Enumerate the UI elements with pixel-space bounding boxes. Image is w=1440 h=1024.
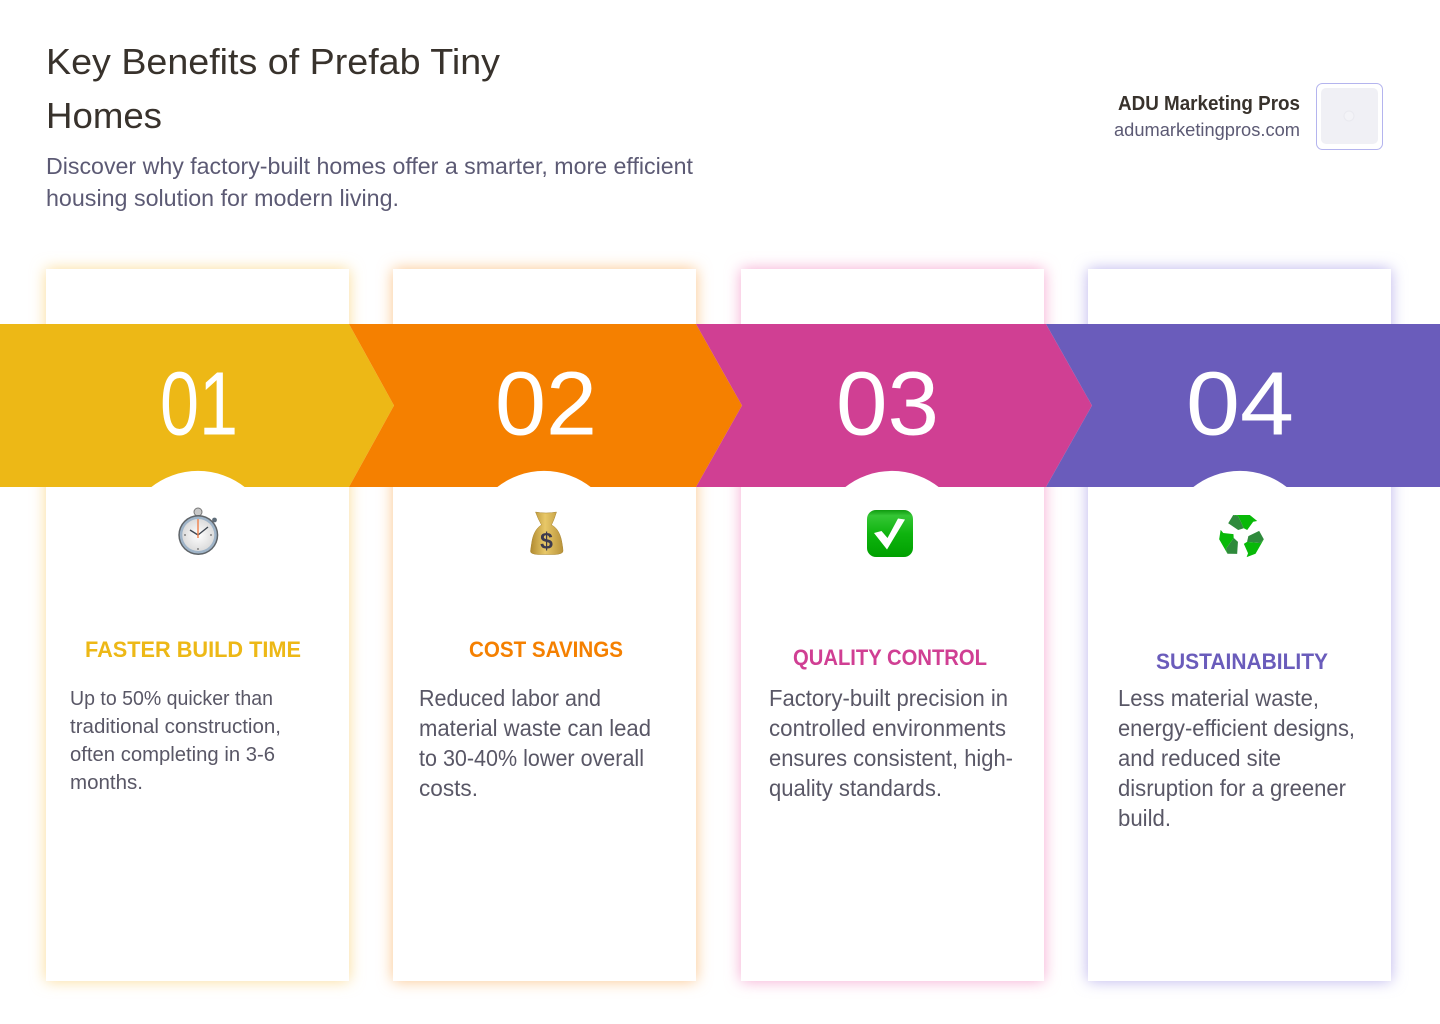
subtitle: housing solution for modern living. (46, 185, 399, 211)
number 03: 03 (836, 354, 939, 454)
icon: stopwatch (178, 508, 218, 555)
heading: sustainability: SUSTAINABILITY (1156, 649, 1328, 674)
subtitle (46, 153, 694, 211)
brand name and website: ADU Marketing Pros (1118, 93, 1300, 115)
text: sustainability description: build. (1118, 805, 1171, 831)
arrow: step 4 chevron (1046, 324, 1440, 487)
text: cost savings description: to 30-40% lower overall (419, 745, 644, 771)
brand name and website (1114, 93, 1300, 140)
icon circle tops (150, 471, 1288, 488)
text: quality control description: controlled environments (769, 715, 1006, 741)
panel: quality control card (741, 269, 1044, 981)
arrow: step 2 chevron (349, 324, 742, 487)
logo placeholder (1316, 84, 1382, 150)
number 01: 01 (160, 354, 238, 454)
panel: cost savings card (393, 269, 696, 981)
text: faster build time description: often completing in 3-6 (70, 744, 275, 766)
subtitle: Discover why factory-built homes offer a smarter, more efficient (46, 153, 694, 179)
text: sustainability description: energy-efficient designs, (1118, 715, 1355, 741)
text: sustainability description: Less material waste, (1118, 685, 1319, 711)
brand name and website: adumarketingpros.com (1114, 119, 1300, 140)
text: quality control description: ensures consistent, high- (769, 745, 1013, 771)
number 02: 02 (495, 354, 597, 454)
icon: money bag: $ (540, 528, 553, 554)
arrow: step 1 chevron (0, 324, 394, 487)
text: cost savings description (419, 685, 651, 801)
text: faster build time description: traditional construction, (70, 716, 281, 738)
heading: faster build time: FASTER BUILD TIME (85, 637, 301, 662)
icon: check mark (867, 510, 913, 557)
text: sustainability description: and reduced site (1118, 745, 1281, 771)
text: cost savings description: material waste can lead (419, 715, 651, 741)
text: quality control description: quality standards. (769, 775, 942, 801)
title: Homes (46, 95, 162, 136)
text: quality control description (769, 685, 1013, 801)
heading: quality control: QUALITY CONTROL (793, 645, 987, 670)
icon: recycling symbol (1215, 515, 1266, 560)
text: sustainability description (1118, 685, 1355, 831)
text: faster build time description (70, 688, 281, 794)
arrow: step 3 chevron (696, 324, 1092, 487)
text: quality control description: Factory-built precision in (769, 685, 1008, 711)
text: sustainability description: disruption for a greener (1118, 775, 1346, 801)
text: cost savings description: costs. (419, 775, 478, 801)
number 04: 04 (1186, 354, 1294, 454)
panel: sustainability card (1088, 269, 1391, 981)
text: cost savings description: Reduced labor and (419, 685, 601, 711)
text: faster build time description: months. (70, 772, 143, 794)
icon: money bag (530, 512, 563, 554)
text: faster build time description: Up to 50% quicker than (70, 688, 273, 710)
title (46, 41, 500, 136)
panel: faster build time card (46, 269, 349, 981)
title: Key Benefits of Prefab Tiny (46, 41, 500, 82)
heading: cost savings: COST SAVINGS (469, 637, 623, 662)
